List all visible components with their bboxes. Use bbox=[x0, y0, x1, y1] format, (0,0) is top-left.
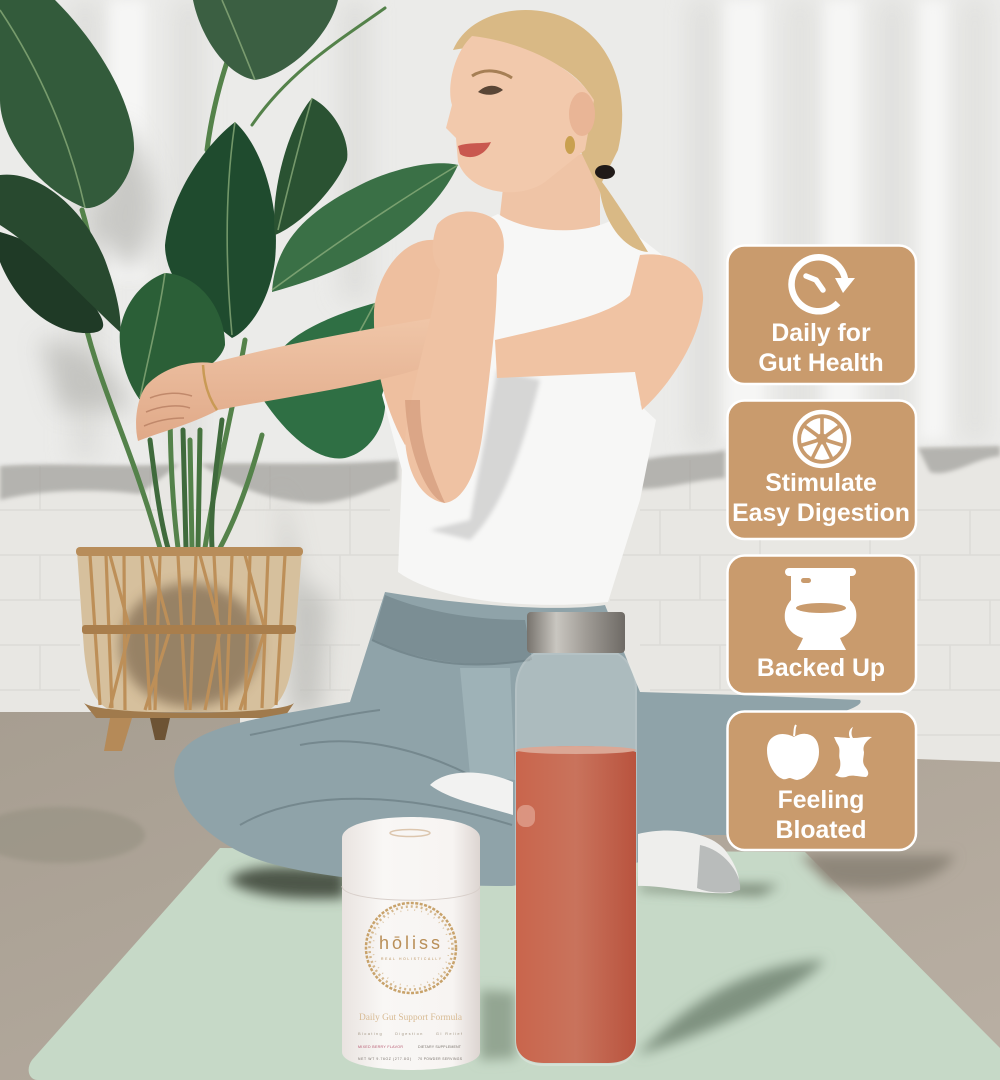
leaf: left lower bbox=[0, 175, 120, 332]
badge: stimulate easy digestion bbox=[728, 400, 916, 539]
hair bbox=[453, 10, 648, 252]
neck bbox=[500, 150, 600, 234]
floor bbox=[0, 712, 1000, 1080]
canister lid bbox=[342, 817, 480, 900]
label line 2: Easy Digestion bbox=[732, 500, 910, 527]
woman stretching bbox=[136, 10, 861, 893]
formula name: Daily Gut Support Formula bbox=[359, 1013, 463, 1023]
label: Backed Up bbox=[757, 655, 885, 682]
bottle glass bbox=[516, 654, 636, 1065]
forearm shadow bbox=[405, 400, 445, 503]
earring bbox=[565, 136, 575, 154]
ingredient row: Bloating Digestion GI Relief bbox=[358, 1031, 463, 1036]
yoga mat bbox=[29, 848, 1000, 1080]
leaf: top centre bbox=[193, 0, 338, 80]
potted plant bbox=[0, 0, 458, 751]
icon: apple core bbox=[834, 727, 872, 777]
leaf: long right bbox=[272, 163, 458, 292]
eye bbox=[478, 86, 503, 95]
face bbox=[446, 36, 594, 192]
leggings bbox=[174, 592, 861, 886]
brand name: hōliss bbox=[379, 933, 443, 953]
label line 2: Gut Health bbox=[758, 350, 884, 377]
brick wall bbox=[0, 446, 1000, 765]
curtain bbox=[0, 0, 1000, 470]
wicker basket bbox=[76, 547, 303, 751]
leaf: top left bbox=[0, 0, 134, 208]
servings: 70 POWDER SERVINGS bbox=[418, 1057, 463, 1061]
supplement label: DIETARY SUPPLEMENT bbox=[418, 1045, 462, 1049]
brand tagline: REAL HOLISTICALLY bbox=[381, 957, 442, 961]
label line 2: Bloated bbox=[776, 817, 866, 844]
gold dotted ring bbox=[366, 903, 456, 993]
flavour: MIXED BERRY FLAVOR bbox=[358, 1045, 403, 1049]
icon: toilet bbox=[785, 568, 856, 650]
mat shadows bbox=[228, 855, 955, 1060]
canister body bbox=[342, 880, 480, 1070]
fingers bbox=[144, 393, 192, 426]
leaf: centre tall bbox=[165, 122, 276, 338]
bottle highlight bbox=[517, 805, 535, 827]
label: Daily for bbox=[771, 320, 871, 347]
juice bbox=[516, 746, 636, 1063]
crop top bbox=[382, 214, 662, 605]
leaf: round lower bbox=[120, 273, 225, 400]
lid seam bbox=[342, 886, 480, 900]
hair tie bbox=[595, 165, 615, 179]
icon: apple bbox=[768, 725, 818, 779]
near shoulder upper arm bbox=[374, 240, 445, 445]
leaf: narrow upper bbox=[274, 98, 347, 235]
badge: backed up bbox=[728, 556, 916, 694]
badge: daily for gut health bbox=[728, 246, 916, 384]
label: Feeling bbox=[778, 787, 864, 814]
badge: feeling bloated bbox=[728, 712, 916, 850]
leaf: bottom right bbox=[262, 303, 385, 458]
floor stain bbox=[0, 807, 145, 863]
leaf: left lower back bbox=[0, 232, 103, 333]
leaf veins bbox=[0, 0, 458, 398]
eyebrow bbox=[472, 71, 512, 78]
juice surface bbox=[516, 746, 636, 754]
icon: clock with arrow bbox=[792, 257, 855, 311]
plant shadow bbox=[40, 120, 330, 715]
water bottle bbox=[516, 612, 636, 1065]
shoulder and far arm bbox=[495, 254, 703, 410]
extended arm and hand bbox=[136, 317, 440, 441]
lips bbox=[458, 142, 491, 157]
stems bbox=[80, 8, 385, 548]
lid ring bbox=[390, 830, 430, 836]
icon: citrus slice bbox=[795, 412, 849, 466]
wrist bracelet bbox=[203, 365, 217, 410]
crop top shading bbox=[430, 370, 540, 540]
ear bbox=[569, 92, 595, 136]
socks bbox=[430, 773, 740, 893]
crossing forearm and fist bbox=[405, 212, 504, 503]
label: Stimulate bbox=[765, 470, 877, 497]
bottle cap bbox=[527, 612, 625, 653]
net weight: NET WT 9.76OZ (277.8G) bbox=[358, 1057, 411, 1061]
product canister bbox=[342, 817, 480, 1070]
curtain shadow on wall bbox=[0, 446, 1000, 503]
